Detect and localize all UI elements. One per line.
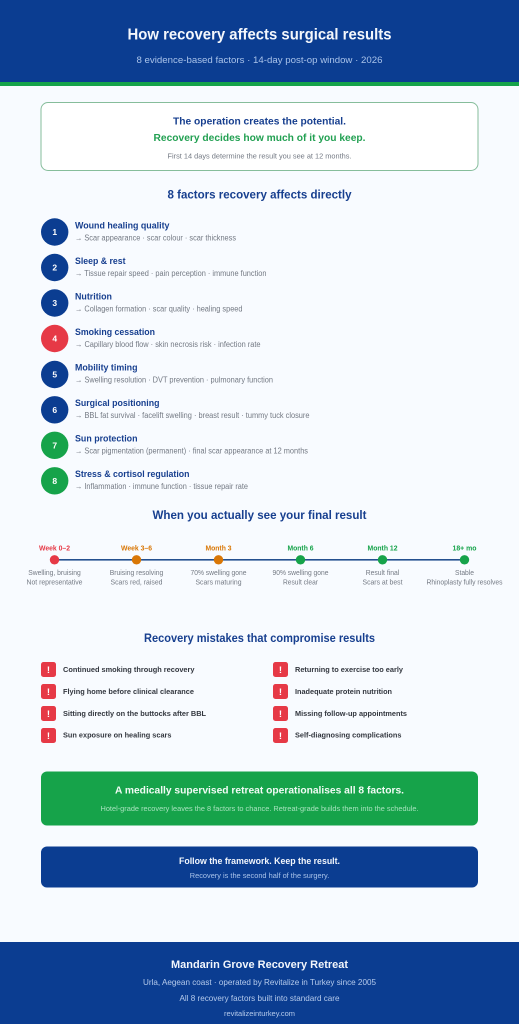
milestone month 3 — [190, 546, 247, 586]
factor 4: 4 — [52, 334, 57, 344]
panel: mistakes list — [41, 662, 407, 743]
mistake 5: ! — [279, 665, 282, 676]
panel: retreat callout — [41, 772, 478, 826]
milestone month 3: 70% swelling gone — [190, 570, 247, 577]
heading: mistakes: Recovery mistakes that compromise results — [144, 632, 375, 645]
mistake 2 — [41, 684, 194, 699]
mistake 7: Missing follow-up appointments — [295, 709, 407, 718]
milestone month 6: 90% swelling gone — [272, 570, 329, 577]
milestone month 6: Month 6 — [288, 546, 314, 552]
milestone week 3-6 — [110, 546, 163, 586]
factor 8: → Inflammation · immune function · tissue repair rate — [75, 482, 248, 491]
factor 7: → Scar pigmentation (permanent) · final scar appearance at 12 months — [75, 446, 308, 456]
milestone month 12: Month 12 — [368, 546, 398, 552]
footer — [0, 942, 519, 1024]
factor 1: 1 — [52, 227, 57, 237]
mistake 8: ! — [279, 731, 282, 742]
panel: closing message: Recovery is the second half of the surgery. — [190, 871, 329, 880]
mistake 4: ! — [47, 731, 50, 742]
factor 5: Mobility timing — [75, 362, 138, 372]
factor 5: → Swelling resolution · DVT prevention · pulmonary function — [75, 376, 273, 384]
factor 8: Stress & cortisol regulation — [75, 469, 190, 479]
mistake 3: Sitting directly on the buttocks after BBL — [63, 709, 206, 718]
mistake 3: ! — [47, 709, 50, 720]
factor 2: Sleep & rest — [75, 256, 126, 266]
mistake 5 — [273, 662, 404, 677]
factor 6: 6 — [52, 405, 57, 415]
panel: closing message: Follow the framework. Keep the result. — [179, 856, 340, 866]
mistake 1: Continued smoking through recovery — [63, 665, 195, 674]
mistake 2: ! — [47, 687, 50, 698]
panel: retreat callout: Hotel-grade recovery leaves the 8 factors to chance. Retreat-grade builds them into the schedule. — [100, 804, 418, 813]
milestone month 6: Result clear — [283, 580, 319, 586]
mistake 1 — [41, 662, 195, 677]
header banner — [0, 0, 519, 86]
milestone month 12 — [362, 546, 403, 586]
milestone month 12: Result final — [366, 570, 400, 577]
milestone week 3-6: Scars red, raised — [110, 580, 163, 586]
milestone 18+ months: Rhinoplasty fully resolves — [426, 580, 503, 586]
mistake 8 — [273, 728, 402, 743]
mistake 6: Inadequate protein nutrition — [295, 687, 392, 696]
mistake 4: Sun exposure on healing scars — [63, 730, 172, 740]
milestone week 3-6: Week 3–6 — [121, 546, 152, 552]
factor 8 — [41, 467, 248, 494]
factor 2 — [41, 254, 266, 281]
factor 4: Smoking cessation — [75, 327, 155, 337]
factor 3: → Collagen formation · scar quality · healing speed — [75, 304, 242, 314]
mistake 6 — [273, 684, 392, 699]
factor 3: Nutrition — [75, 292, 112, 302]
panel: closing message — [41, 846, 478, 888]
factor 2: → Tissue repair speed · pain perception · immune function — [75, 269, 266, 278]
mistake 1: ! — [47, 665, 50, 676]
factor 7 — [41, 432, 308, 459]
factor 6 — [41, 396, 310, 423]
milestone 18+ months: Stable — [455, 570, 474, 577]
milestone month 3: Scars maturing — [196, 580, 242, 586]
factor 7: 7 — [52, 440, 57, 450]
factor 1 — [41, 218, 236, 246]
factor 5: 5 — [52, 370, 57, 380]
factor 5 — [41, 361, 273, 388]
mistake 3 — [41, 706, 206, 721]
factor 4: → Capillary blood flow · skin necrosis risk · infection rate — [75, 340, 260, 349]
panel: retreat callout: A medically supervised retreat operationalises all 8 factors. — [115, 786, 404, 796]
mistake 6: ! — [279, 687, 282, 698]
footer: All 8 recovery factors built into standard care — [180, 994, 340, 1003]
mistake 2: Flying home before clinical clearance — [63, 687, 194, 696]
footer: Mandarin Grove Recovery Retreat — [171, 959, 348, 971]
panel: key message: Recovery decides how much of it you keep. — [154, 133, 366, 144]
factor 7: Sun protection — [75, 434, 138, 444]
footer: revitalizeinturkey.com — [224, 1009, 295, 1018]
mistake 5: Returning to exercise too early — [295, 665, 404, 674]
title: How recovery affects surgical results — [128, 26, 392, 44]
factor 1: → Scar appearance · scar colour · scar thickness — [75, 234, 236, 242]
factor 1: Wound healing quality — [75, 220, 170, 230]
milestone week 0-2: Week 0–2 — [39, 546, 70, 552]
mistake 4 — [41, 728, 172, 743]
factor 6: Surgical positioning — [75, 398, 160, 408]
footer: Urla, Aegean coast · operated by Revitalize in Turkey since 2005 — [143, 978, 376, 987]
mistake 8: Self-diagnosing complications — [295, 730, 402, 740]
subtitle: 8 evidence-based factors · 14-day post-op window · 2026 — [136, 55, 382, 66]
milestone 18+ months — [426, 546, 503, 586]
panel: factors list — [41, 218, 310, 495]
factor 2: 2 — [52, 262, 57, 272]
factor 3: 3 — [52, 298, 57, 308]
milestone week 0-2: Not representative — [26, 580, 83, 586]
factor 4 — [41, 325, 260, 352]
factor 8: 8 — [52, 476, 57, 486]
milestone 18+ months: 18+ mo — [452, 546, 476, 552]
milestone month 6 — [272, 546, 329, 586]
panel: key message: First 14 days determine the result you see at 12 months. — [168, 152, 352, 160]
panel: key message — [41, 102, 478, 170]
panel: key message: The operation creates the potential. — [173, 116, 346, 128]
milestone week 0-2 — [26, 546, 83, 586]
milestone week 3-6: Bruising resolving — [110, 570, 163, 577]
milestone month 12: Scars at best — [362, 580, 403, 586]
mistake 7: ! — [279, 709, 282, 720]
milestone week 0-2: Swelling, bruising — [28, 570, 81, 577]
factor 6: → BBL fat survival · facelift swelling · breast result · tummy tuck closure — [75, 411, 310, 420]
factor 3 — [41, 289, 242, 317]
mistake 7 — [273, 706, 407, 721]
heading: timeline: When you actually see your final result — [152, 509, 367, 522]
milestone month 3: Month 3 — [206, 546, 232, 552]
timeline chart — [26, 546, 503, 586]
heading: 8 factors: 8 factors recovery affects directly — [168, 188, 352, 202]
